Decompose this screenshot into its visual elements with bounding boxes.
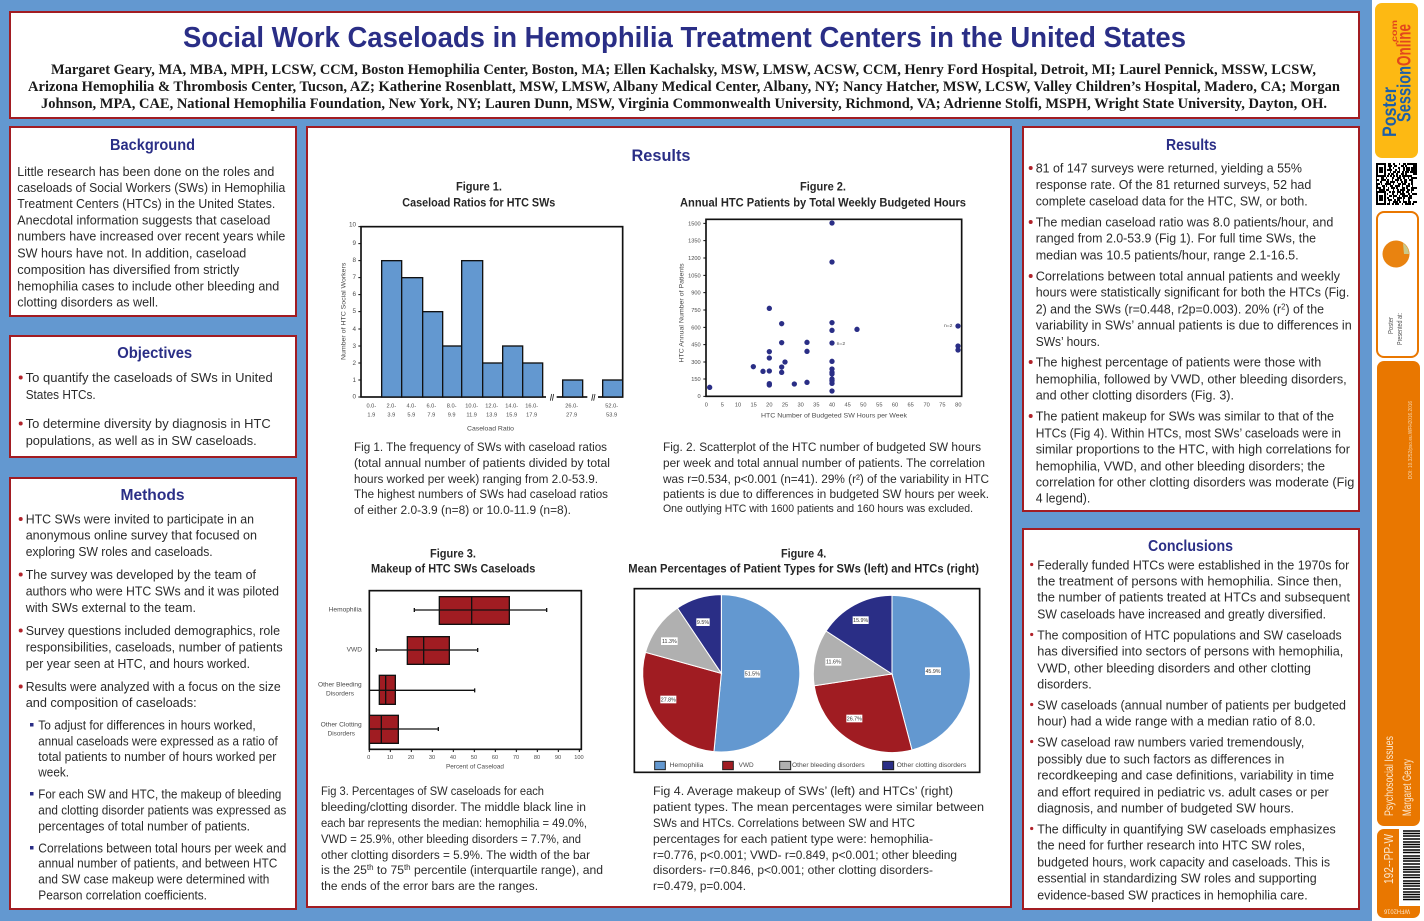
chart: figure 1 histogram: 7 (352, 274, 356, 281)
heading: objectives: Objectives (117, 345, 192, 362)
results list: complete caseload data for the HTC, SW, or both. (1036, 193, 1308, 208)
chart: figure 1 histogram: 5 (352, 308, 356, 315)
methods list: The survey was developed by the team of (26, 567, 256, 582)
conclusions list: Federally funded HTCs were established in the 1970s for (1037, 557, 1350, 572)
conclusions list (1030, 557, 1350, 902)
figure 4 caption: disorders- r=0.846, p<0.001; other clotting disorders- (653, 863, 933, 877)
background text: clotting disorders as well. (17, 295, 158, 310)
background text: composition has diversified from strictly (17, 262, 240, 277)
methods list: authors who were HTC SWs and it was piloted (26, 583, 279, 598)
sidebar: poster session online logo: Online (1394, 24, 1416, 66)
chart: figure 2 scatterplot: HTC Annual Number of Patients (679, 263, 685, 363)
sidebar: orange category panel (1377, 361, 1420, 826)
methods list: Correlations between total hours per week and (38, 840, 286, 855)
results list: correlation for other clotting disorders was moderate (Fig (1036, 474, 1354, 489)
objectives list: To determine diversity by diagnosis in HTC (26, 416, 271, 431)
results list: hemophilia, followed by VWD, other bleeding disorders, (1036, 371, 1347, 386)
chart: figure 1 histogram: 52.0- (605, 403, 618, 409)
figure 1 caption (354, 440, 610, 517)
methods list: total patients to number of hours worked per (38, 749, 277, 764)
figure 3 caption: Fig 3. Percentages of SW caseloads for each (321, 784, 544, 798)
legend: Other clotting disorders (897, 763, 966, 769)
chart: figure 2 scatterplot: n=2 (837, 341, 845, 347)
methods list: Pearson correlation coefficients. (38, 887, 207, 902)
chart: figure 1 histogram: 1 (352, 377, 356, 384)
chart: figure 4 pie charts: 27.8% (661, 697, 676, 703)
chart: figure 1 histogram: 5.9 (407, 412, 415, 418)
chart: figure 1 histogram: 14.0- (505, 403, 518, 409)
sidebar: QR code (1376, 164, 1417, 204)
legend: Other bleeding disorders (792, 763, 865, 769)
conclusions list: the treatment of persons with hemophilia. Since then, (1037, 573, 1342, 588)
conclusions list: The difficulty in quantifying SW caseloads emphasizes (1037, 821, 1336, 836)
header panel (10, 12, 1359, 118)
figure 3 caption: the ends of the error bars are the ranges. (321, 879, 538, 893)
chart: figure 4 pie charts: 45.9% (925, 669, 941, 675)
figure 4 title: Mean Percentages of Patient Types for SWs (left) and HTCs (right) (628, 563, 979, 575)
figure 1 title (402, 182, 555, 210)
chart: figure 2 scatterplot: 300 (691, 360, 701, 366)
figure 1 title: Figure 1. (456, 182, 502, 194)
chart: figure 3 box plot: VWD (347, 648, 363, 654)
methods list: HTC SWs were invited to participate in an (26, 511, 254, 526)
sidebar: orange category panel: DOI: 10.3252/pso.eu.WFH2016.2016 (1408, 401, 1414, 479)
chart: figure 4 pie charts: 51.5% (745, 672, 760, 678)
background text: Anecdotal information suggests that caseload (17, 213, 270, 228)
chart: figure 2 scatterplot: 1350 (688, 239, 701, 245)
chart: figure 1 histogram: 6.0- (426, 403, 436, 409)
figure 1 caption: (total annual number of patients divided by total (354, 456, 610, 470)
figure 4 caption: SWs and HTCs. Correlations between SW and HTC (653, 816, 915, 830)
conclusions list: evidence-based SW practices in hemophilia care. (1037, 887, 1308, 902)
icon: barcode (1403, 831, 1420, 900)
results list: ) of the (1285, 301, 1324, 316)
figure 3 caption: bleeding/clotting disorder. The middle black line in (321, 800, 586, 814)
chart: figure 4 pie charts: 26.7% (847, 716, 862, 722)
chart: figure 3 box plot: 30 (429, 755, 435, 761)
figure 2 caption: patients is due to differences in budgeted SW hours per week. (663, 487, 989, 501)
methods list: Results were analyzed with a focus on the size (26, 679, 281, 694)
sidebar: presented at panel: Poster (1388, 316, 1395, 334)
figure 4 title (628, 548, 979, 575)
chart: figure 2 scatterplot: 5 (721, 403, 724, 409)
figure 4 caption: patient types. The mean percentages were similar between (653, 800, 984, 814)
sidebar: poster id and barcode: 192--PP-W (1381, 833, 1396, 884)
panel: right results (1023, 127, 1359, 511)
legend: Hemophilia (670, 763, 704, 769)
authors: Margaret Geary, MA, MBA, MPH, LCSW, CCM, Boston Hemophilia Center, Boston, MA; Ellen Kachalsky, MSW, LMSW, ACSW, CCM, Henry Ford Hospital, Detroit, MI; Laurel Pennick, MSSW, LCSW, (51, 62, 1316, 78)
chart: figure 3 box plot (318, 591, 584, 771)
chart: figure 3 box plot: 80 (534, 755, 540, 761)
methods list: percentages of total number of patients. (38, 818, 250, 833)
chart: figure 1 histogram: 2 (352, 360, 356, 367)
conclusions list: the need for further research into HTC SW roles, (1037, 837, 1305, 852)
pie: social workers (643, 595, 800, 752)
conclusions list: diagnosis, and number of budgeted SW hours. (1037, 800, 1294, 815)
chart: figure 1 histogram: 9.9 (448, 412, 456, 418)
chart: figure 2 scatterplot: 750 (691, 308, 701, 314)
chart: figure 2 scatterplot: 40 (829, 403, 835, 409)
chart: figure 4 pie charts (634, 589, 980, 772)
methods list: and clotting disorder patients was expressed as (38, 802, 286, 817)
results list: 2 (1281, 302, 1286, 311)
figure 3 caption: to 75 (374, 863, 404, 877)
figure 2 caption: was r=0.534, p<0.001 (n=41). 29% (r²) of the variability in HTC (662, 472, 989, 486)
chart: figure 1 histogram: 9 (352, 240, 356, 247)
pie: HTCs (813, 595, 970, 753)
chart: figure 3 box plot: 0 (367, 755, 370, 761)
figure 3 caption: other clotting disorders = 5.9%. The width of the bar (321, 848, 590, 862)
figure 3 title (371, 548, 535, 575)
conclusions list: recordkeeping and case definitions, variability in time (1037, 767, 1334, 782)
objectives list: States HTCs. (26, 387, 96, 402)
background text: SW hours have not. In addition, caseload (17, 246, 246, 261)
chart: figure 2 scatterplot: 1050 (688, 273, 701, 279)
figure 1 caption: Fig 1. The frequency of SWs with caseload ratios (354, 440, 607, 454)
conclusions list: essential in standardizing SW roles and supporting (1037, 870, 1317, 885)
chart: figure 1 histogram: 3.9 (387, 412, 395, 418)
figure 3 caption: th (404, 863, 411, 872)
background text: caseloads of Social Workers (SWs) in Hemophilia (17, 180, 286, 195)
heading: right results: Results (1166, 137, 1217, 154)
results list: hours were statistically significant for both the HTCs (Fig. (1036, 284, 1349, 299)
authors (28, 62, 1340, 112)
panel: objectives (10, 336, 296, 457)
chart: figure 2 scatterplot: 30 (798, 403, 804, 409)
results list: 4 legend). (1036, 490, 1090, 505)
methods list: and SW case makeup were determined with (38, 871, 269, 886)
methods list: For each SW and HTC, the makeup of bleeding (38, 786, 281, 801)
figure 2 caption: Fig. 2. Scatterplot of the HTC number of budgeted SW hours (663, 440, 981, 454)
chart: figure 3 box plot: Disorders (328, 732, 355, 738)
figure 3 title: Figure 3. (430, 548, 476, 560)
conclusions list: and effort required in pediatric vs. adult cases or per (1037, 784, 1329, 799)
chart: figure 4 pie charts: 9.5% (697, 620, 709, 626)
sidebar: poster id and barcode: WFH2016 (1384, 908, 1410, 914)
objectives list: To quantify the caseloads of SWs in United (26, 370, 273, 385)
chart: figure 2 scatterplot: 50 (860, 403, 866, 409)
sidebar: presented at panel (1377, 212, 1418, 357)
chart: figure 1 histogram: 11.9 (466, 412, 477, 418)
chart: figure 1 histogram: 53.9 (606, 412, 617, 418)
chart: figure 1 histogram: 12.0- (485, 403, 498, 409)
results list: and other clotting disorders (Fig. 3). (1036, 387, 1234, 402)
figure 3 caption: th (367, 863, 374, 872)
chart: figure 2 scatterplot: 0 (705, 403, 708, 409)
chart: figure 3 box plot: 70 (513, 755, 519, 761)
sidebar: orange category panel: Psychosocial Issues (1382, 736, 1396, 816)
chart: figure 1 histogram: 8.0- (447, 403, 457, 409)
chart: figure 2 scatterplot: 1500 (688, 221, 701, 227)
icon: congress logo (1382, 240, 1410, 268)
chart: figure 2 scatterplot: 150 (691, 377, 701, 383)
figure 2 title: Figure 2. (800, 182, 846, 194)
chart: figure 2 scatterplot: 75 (939, 403, 945, 409)
chart: figure 3 box plot: Other Bleeding (318, 683, 362, 689)
results list: SWs’ hours. (1036, 334, 1100, 349)
conclusions list: The composition of HTC populations and SW caseloads (1037, 627, 1342, 642)
chart: figure 4 pie charts: 11.6% (826, 660, 841, 666)
results list: ranged from 2.0-53.9 (Fig 1). For full time SWs, the (1036, 230, 1316, 245)
methods list (19, 511, 286, 902)
chart: figure 3 box plot: 60 (492, 755, 498, 761)
chart: figure 1 histogram (341, 222, 623, 433)
panel: methods (10, 478, 296, 909)
sidebar: poster session online logo: .com (1390, 20, 1399, 45)
results list: 2) and the SWs (r=0.448, r2p=0.003). 20% (r (1036, 301, 1290, 316)
figure 1 title: Caseload Ratios for HTC SWs (402, 198, 555, 210)
chart: figure 1 histogram: 3 (352, 343, 356, 350)
figure 4 caption: percentages for each patient type were: hemophilia- (653, 832, 933, 846)
results list: median was 10.5 patients/hour, range 2.1-16.5. (1036, 247, 1299, 262)
conclusions list: SW caseloads (annual number of patients per budgeted (1037, 697, 1346, 712)
results list: hemophilia, VWD, and other bleeding disorders; the (1036, 458, 1325, 473)
sidebar: poster id and barcode (1377, 829, 1420, 918)
figure 4 caption: r=0.776, p<0.001; VWD- r=0.849, p<0.001; other bleeding (653, 848, 957, 862)
chart: figure 1 histogram: 0 (352, 394, 356, 401)
chart: figure 2 scatterplot: 70 (924, 403, 930, 409)
chart: figure 1 histogram: 17.9 (526, 412, 537, 418)
methods list: Survey questions included demographics, role (26, 623, 280, 638)
results list: The highest percentage of patients were those with (1036, 354, 1321, 369)
results list: 81 of 147 surveys were returned, yielding a 55% (1036, 160, 1302, 175)
chart: figure 4 pie charts: 11.3% (662, 639, 677, 645)
background text: Little research has been done on the roles and (17, 164, 274, 179)
sidebar: poster session online logo: Session (1394, 66, 1416, 122)
panel: central results (307, 127, 1011, 907)
conclusions list: budgeted hours, work capacity and caseloads. This is (1037, 854, 1330, 869)
chart: figure 3 box plot: Hemophilia (329, 608, 362, 614)
results list: HTCs (Fig 4). Within HTCs, most SWs’ caseloads were in (1036, 425, 1341, 440)
chart: figure 1 histogram: Caseload Ratio (467, 427, 515, 433)
chart: figure 2 scatterplot: 600 (691, 325, 701, 331)
figure 3 title: Makeup of HTC SWs Caseloads (371, 563, 535, 575)
chart: figure 2 scatterplot: 55 (876, 403, 882, 409)
legend: VWD (739, 763, 754, 769)
conclusions list: disorders. (1037, 676, 1092, 691)
figure 2 title (680, 182, 966, 210)
objectives list (19, 370, 273, 448)
conclusions list: SW caseloads have increased and greatly diversified. (1037, 606, 1326, 621)
results list: response rate. Of the 81 returned surveys, 52 had (1036, 177, 1311, 192)
chart: figure 2 scatterplot: 25 (782, 403, 788, 409)
figure 3 caption: is the 25 (321, 863, 367, 877)
figure 4 caption: Fig 4. Average makeup of SWs’ (left) and HTCs’ (right) (653, 784, 953, 798)
chart: figure 2 scatterplot: 65 (908, 403, 914, 409)
chart: figure 1 histogram: 4 (352, 326, 356, 333)
figure 1 caption: of either 2.0-3.9 (n=8) or 10.0-11.9 (n=8). (354, 503, 571, 517)
heading: results: Results (632, 146, 690, 165)
figure 3 caption: percentile (interquartile range), and (411, 863, 603, 877)
chart: figure 2 scatterplot: 20 (766, 403, 772, 409)
figure 4 title: Figure 4. (781, 548, 826, 560)
heading: conclusions: Conclusions (1148, 538, 1233, 555)
chart: figure 1 histogram: 27.9 (566, 412, 577, 418)
authors: Arizona Hemophilia & Thrombosis Center, Tucson, AZ; Katherine Rosenblatt, MSW, LMSW, Albany Medical Center, Albany, NY; Nancy Hatcher, MSW, LCSW, Valley Children’s Hospital, Madero, CA; Morgan (28, 79, 1340, 95)
methods list: exploring SW roles and caseloads. (26, 544, 213, 559)
heading: background: Background (110, 137, 195, 154)
chart: figure 3 box plot: 100 (574, 755, 584, 761)
chart: figure 4 pie charts: 15.9% (853, 618, 868, 624)
chart: figure 1 histogram: 13.9 (486, 412, 497, 418)
chart: figure 2 scatterplot: 0 (698, 394, 701, 400)
conclusions list: VWD, other bleeding disorders and other clotting (1037, 660, 1311, 675)
results list: similar proportions to the HTC, with high correlations for (1036, 441, 1351, 456)
sidebar: presented at panel: Presented at: (1397, 313, 1404, 345)
chart: figure 2 scatterplot (679, 219, 962, 419)
conclusions list: has diversified into sectors of persons with hemophilia, (1037, 643, 1343, 658)
chart: figure 2 scatterplot: 450 (691, 343, 701, 349)
results list: Correlations between total annual patients and weekly (1036, 268, 1341, 283)
panel: conclusions (1023, 529, 1359, 909)
heading: methods: Methods (120, 487, 184, 504)
conclusions list: the number of patients treated at HTCs and subsequent (1037, 589, 1350, 604)
results list (1029, 160, 1354, 505)
chart: figure 2 scatterplot: 35 (813, 403, 819, 409)
chart: figure 3 box plot: Percent of Caseload (446, 765, 504, 771)
conclusions list: SW caseload raw numbers varied tremendously, (1037, 734, 1304, 749)
methods list: annual number of patients, and between HTC (38, 856, 277, 871)
chart: figure 1 histogram: 7.9 (427, 412, 435, 418)
chart: figure 2 scatterplot: 10 (735, 403, 741, 409)
chart: figure 3 box plot: 20 (408, 755, 414, 761)
chart: figure 1 histogram: 0.0- (366, 403, 376, 409)
background text (17, 164, 286, 310)
methods list: annual caseloads were expressed as a ratio of (38, 733, 278, 748)
background text: Treatment Centers (HTCs) in the United States. (17, 196, 275, 211)
chart: figure 1 histogram: 10.0- (465, 403, 478, 409)
figure 3 caption (321, 784, 603, 893)
results list: variability in SWs’ annual patients is due to differences in (1036, 317, 1352, 332)
chart: figure 2 scatterplot: 900 (691, 291, 701, 297)
chart: figure 2 scatterplot: 1200 (688, 256, 701, 262)
results list: The median caseload ratio was 8.0 patients/hour, and (1036, 214, 1333, 229)
legend (655, 761, 966, 770)
chart: figure 3 box plot: 40 (450, 755, 456, 761)
chart: figure 1 histogram: 4.0- (406, 403, 416, 409)
authors: Johnson, MPA, CAE, National Hemophilia Foundation, New York, NY; Lauren Dunn, MSW, Virginia Commonwealth University, Richmond, VA; Adrienne Stolfi, MSPH, Wright State University, Dayton, OH. (41, 96, 1327, 112)
methods list: To adjust for differences in hours worked, (38, 717, 256, 732)
chart: figure 1 histogram: 26.0- (565, 403, 578, 409)
sidebar: poster session online logo (1375, 3, 1418, 158)
chart: figure 3 box plot: 10 (387, 755, 393, 761)
methods list: anonymous online survey that focused on (26, 527, 257, 542)
figure 1 caption: The highest numbers of SWs had caseload ratios (354, 487, 608, 501)
results list: The patient makeup for SWs was similar to that of the (1036, 408, 1334, 423)
background text: hemophilia cases to include other bleeding and (17, 279, 279, 294)
figure 3 caption: VWD = 25.9%, other bleeding disorders = 7.7%, and (321, 832, 581, 846)
chart: figure 2 scatterplot: 60 (892, 403, 898, 409)
chart: figure 1 histogram: 8 (352, 257, 356, 264)
title: Social Work Caseloads in Hemophilia Treatment Centers in the United States (183, 22, 1186, 54)
methods list: with SWs external to the team. (25, 600, 196, 615)
figure 4 caption (653, 784, 984, 893)
conclusions list: hour) had a wide range with a median ratio of 8.0. (1037, 713, 1316, 728)
chart: figure 3 box plot: 90 (555, 755, 561, 761)
chart: figure 1 histogram: Number of HTC Social Workers (341, 263, 347, 360)
methods list: week. (37, 764, 69, 779)
objectives list: populations, as well as in SW caseloads. (26, 433, 257, 448)
background text: numbers have increased over recent years while (17, 229, 285, 244)
panel: background (10, 127, 296, 316)
chart: figure 2 scatterplot: HTC Number of Budgeted SW Hours per Week (761, 413, 907, 419)
chart: figure 1 histogram: 10 (349, 222, 356, 229)
figure 2 title: Annual HTC Patients by Total Weekly Budgeted Hours (680, 198, 966, 210)
sidebar: orange category panel: Margaret Geary (1400, 759, 1414, 816)
chart: figure 1 histogram: 2.0- (386, 403, 396, 409)
chart: figure 2 scatterplot: 45 (845, 403, 851, 409)
figure 4 caption: r=0.479, p=0.004. (653, 879, 746, 893)
figure 2 caption (662, 440, 989, 515)
chart: figure 1 histogram: 1.9 (367, 412, 375, 418)
methods list: per year seen at HTC, and hours worked. (26, 656, 250, 671)
chart: figure 1 histogram: 16.0- (525, 403, 538, 409)
figure 3 caption: each bar represents the median: hemophilia = 49.0%, (321, 816, 587, 830)
figure 2 caption: per week and total annual number of patients. The correlation (663, 456, 985, 470)
chart: figure 3 box plot: Other Clotting (321, 723, 362, 729)
methods list: responsibilities, caseloads, number of patients (26, 639, 283, 654)
conclusions list: possibly due to such factors as differences in (1037, 751, 1284, 766)
chart: figure 3 box plot: Disorders (326, 692, 354, 698)
figure 1 caption: hours worked per week) ranging from 2.0-53.9. (354, 472, 598, 486)
sidebar: poster session online logo: Poster (1380, 86, 1401, 137)
chart: figure 2 scatterplot: 80 (955, 403, 961, 409)
methods list: and composition of caseloads: (26, 695, 197, 710)
chart: figure 2 scatterplot: 15 (751, 403, 757, 409)
chart: figure 2 scatterplot: n=2 (944, 323, 953, 329)
chart: figure 1 histogram: 6 (352, 291, 356, 298)
figure 2 caption: One outlying HTC with 1600 patients and 160 hours was excluded. (663, 503, 973, 515)
chart: figure 3 box plot: 50 (471, 755, 477, 761)
chart: figure 1 histogram: 15.9 (506, 412, 517, 418)
